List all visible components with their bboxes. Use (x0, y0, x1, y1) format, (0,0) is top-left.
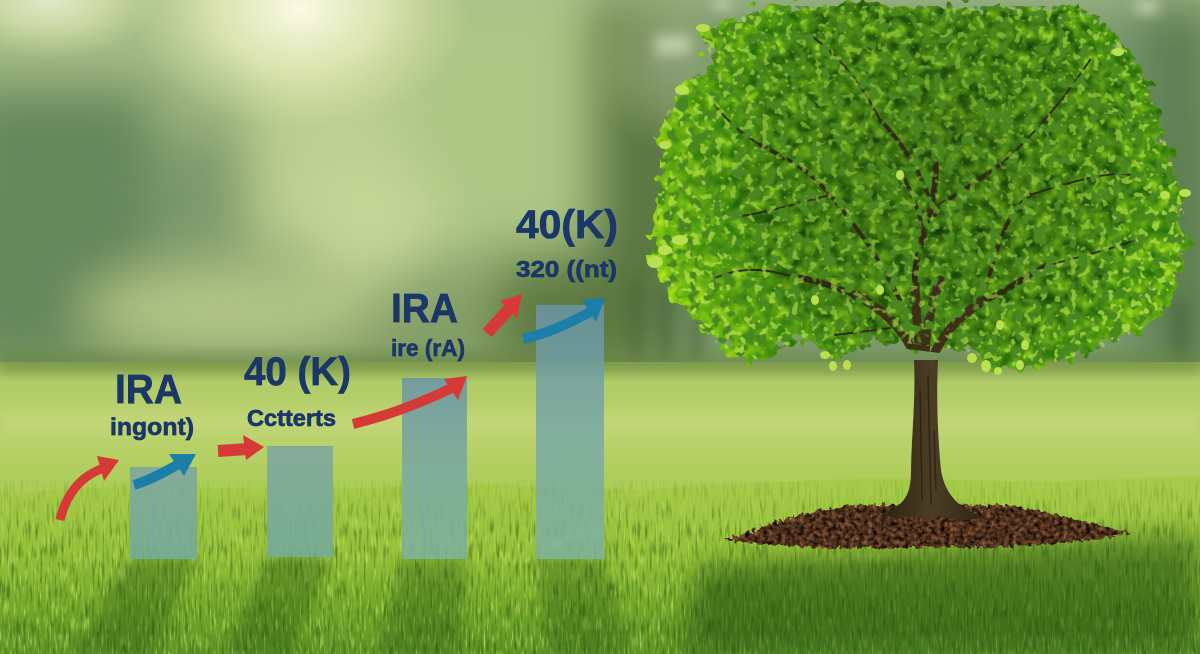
label: 40(K) Cctterts: Cctterts (247, 405, 336, 431)
tree mulch mound (725, 505, 1132, 548)
red arrow 1 (60, 456, 119, 520)
sunlit leaf highlights (647, 24, 1191, 375)
red arrow 3 (353, 376, 467, 424)
red arrow 4 (487, 294, 522, 333)
bar 2 (267, 446, 333, 557)
foliage layer over branches (651, 6, 1185, 368)
bar 3 (402, 378, 467, 559)
tree trunk and roots (880, 360, 985, 520)
blurred forest background (0, 0, 1200, 380)
bar 1 (130, 467, 197, 559)
tree canopy foliage (651, 6, 1185, 368)
label: IRA ire (rA): ire (rA) (391, 335, 465, 361)
label: 40(K) 320 ((nt) (516, 203, 618, 282)
label: 40(K) 320 ((nt): 320 ((nt) (516, 256, 617, 282)
label: 40(K) Cctterts: 40 (K) (244, 350, 351, 394)
label: IRA ingont (110, 366, 194, 441)
tree branches (715, 35, 1150, 362)
bar chart (130, 305, 604, 559)
label: IRA ire (rA) (391, 285, 465, 361)
label: IRA ingont: ingont) (110, 414, 194, 441)
blue arrow 2 (523, 298, 605, 339)
foreground grass (0, 476, 1200, 654)
label: 40(K) 320 ((nt): 40(K) (516, 203, 618, 247)
mid-ground lawn (0, 352, 1200, 502)
label: IRA ire (rA): IRA (391, 285, 458, 331)
red arrow 2 (218, 435, 264, 460)
bar 4 (536, 305, 604, 559)
label: IRA ingont: IRA (115, 366, 182, 412)
ground shadows (75, 535, 1200, 654)
sunlit leaf sparkle layer (651, 6, 1185, 368)
label: 40(K) Cctterts (244, 350, 351, 431)
blue arrow 1 (134, 454, 196, 485)
